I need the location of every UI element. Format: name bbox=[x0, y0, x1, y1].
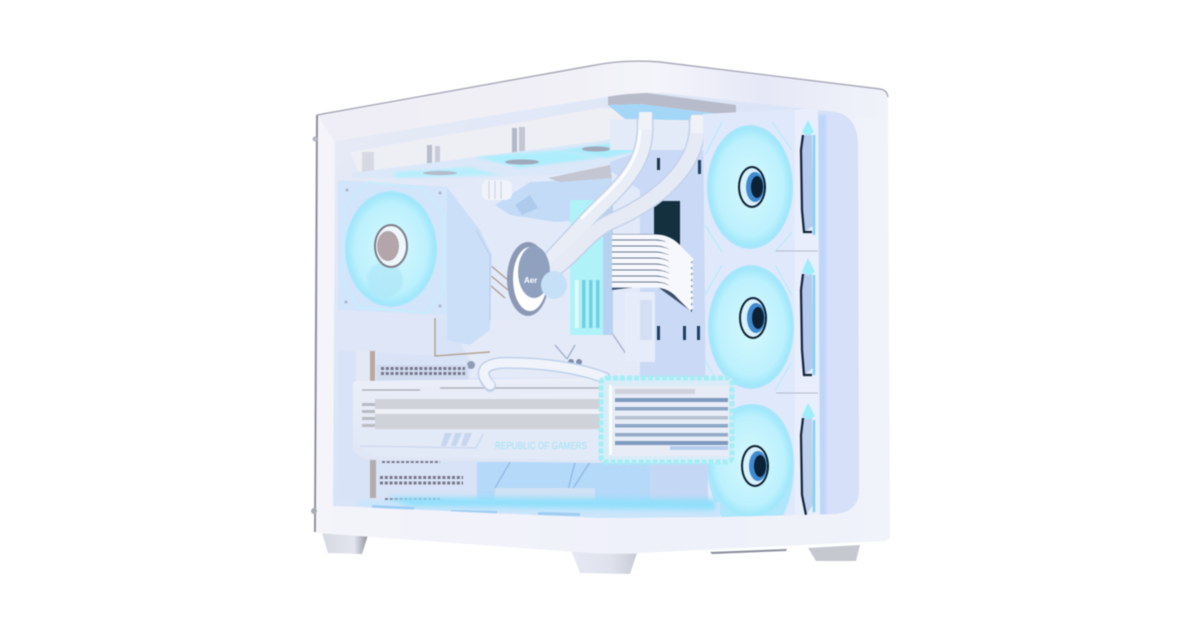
foot: middle bbox=[571, 550, 637, 574]
right interior blue edge bbox=[818, 115, 826, 515]
GPU end plate with LED ring bbox=[600, 377, 733, 463]
right fan: bottom bbox=[707, 404, 794, 518]
graphics card bbox=[353, 378, 602, 463]
motherboard bbox=[447, 165, 640, 378]
lower compartment bbox=[477, 462, 708, 502]
power cable bundle bbox=[612, 234, 692, 362]
side vent slots bbox=[801, 120, 815, 515]
liquid cooler tubes bbox=[545, 112, 704, 274]
AIO pump head: Aer bbox=[524, 276, 537, 285]
foot: right bbox=[808, 545, 860, 561]
PCIe slot covers bbox=[356, 351, 468, 499]
text: GPU branding: REPUBLIC OF GAMERS bbox=[495, 441, 587, 452]
backplate slots bbox=[656, 325, 701, 341]
back wall behind motherboard bbox=[610, 150, 704, 376]
GPU power cable bbox=[484, 363, 605, 386]
bottom glow strip bbox=[357, 497, 720, 518]
motherboard tray edge bbox=[435, 318, 490, 356]
memory modules bbox=[570, 200, 613, 335]
foot: left bbox=[322, 533, 368, 554]
left fan bbox=[338, 180, 492, 345]
underside shadow bbox=[710, 549, 787, 554]
AIO pump head bbox=[507, 242, 567, 316]
top bracket bar bbox=[608, 92, 736, 116]
product illustration: PC case bbox=[310, 60, 890, 574]
right interior glow panel bbox=[828, 432, 858, 514]
rear I/O cutout bbox=[654, 201, 680, 245]
gap under left fan bbox=[338, 316, 435, 356]
right fan: middle bbox=[708, 265, 794, 389]
right fan: top bbox=[707, 125, 793, 249]
lower left back panel bbox=[338, 318, 480, 505]
case outer frame bbox=[311, 61, 890, 554]
top radiator fans and mounting plate bbox=[350, 108, 712, 178]
case interior opening bbox=[333, 92, 860, 520]
right side fan column frame bbox=[703, 108, 820, 517]
